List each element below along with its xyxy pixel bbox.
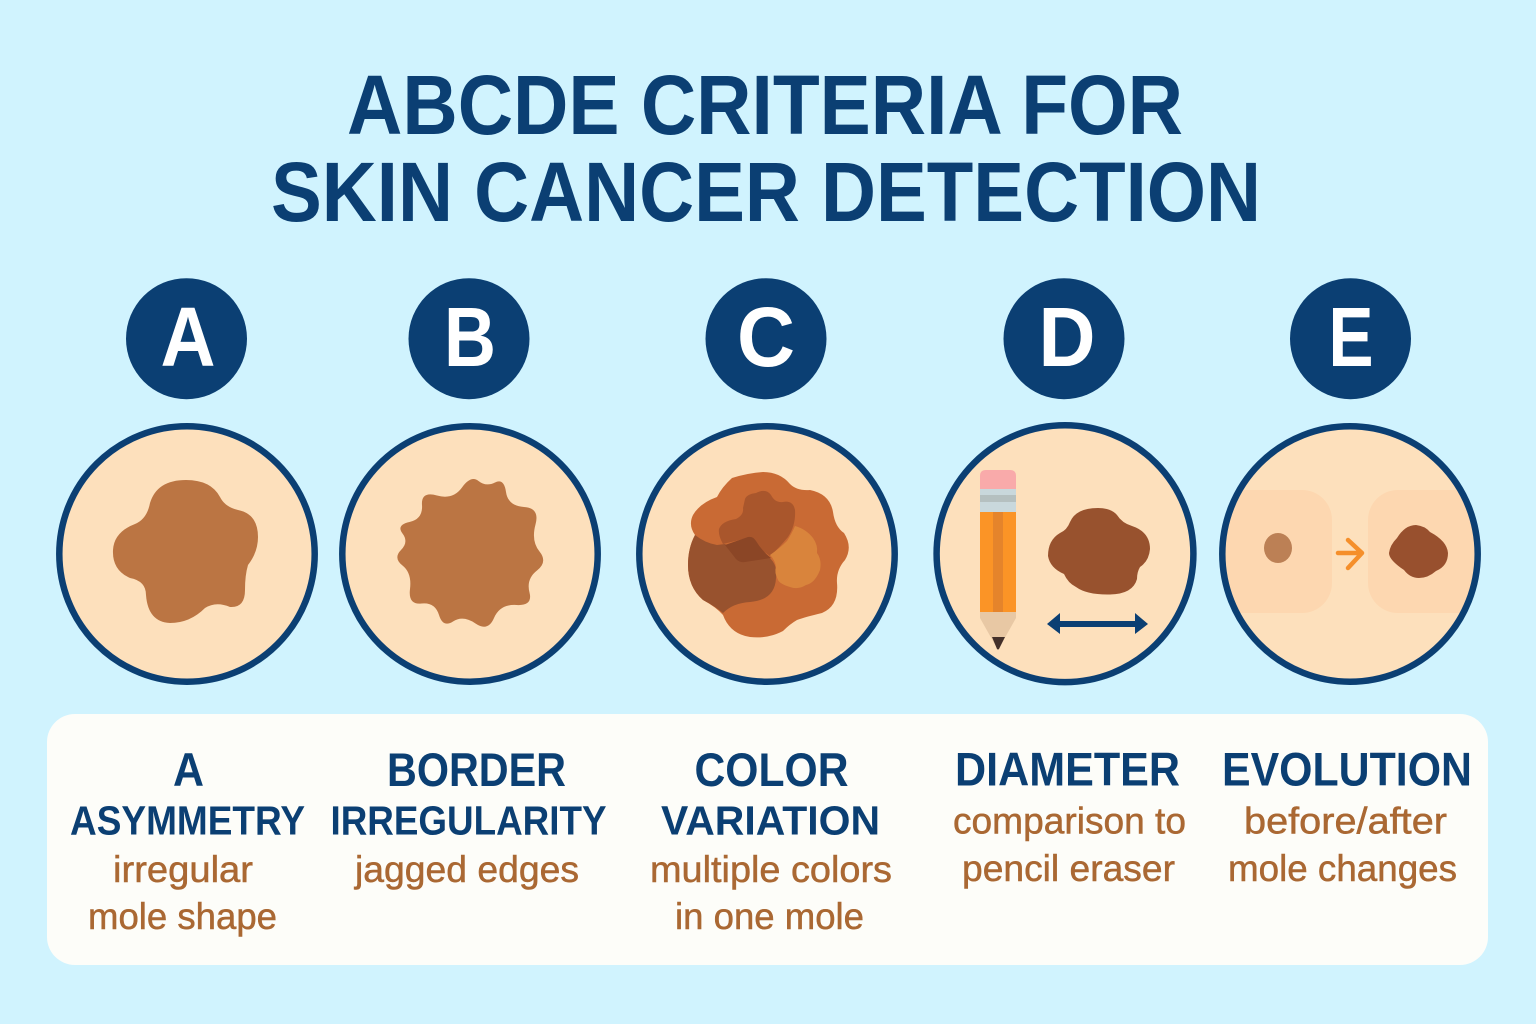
badge A: A: [160, 290, 216, 384]
panel: descriptions: [47, 714, 1488, 965]
jagged-edge mole: [397, 479, 543, 627]
dark brown region: [688, 535, 776, 613]
mid brown region: [719, 491, 795, 556]
illustration: border irregularity: [342, 426, 598, 682]
arrow: diameter measure: [1047, 613, 1148, 634]
text: asymmetry: irregular: [113, 849, 253, 890]
light orange region: [770, 526, 821, 588]
badge C: [706, 278, 826, 399]
text: color: COLOR: [694, 743, 848, 796]
title: SKIN CANCER DETECTION: [271, 145, 1261, 239]
badge E: [1290, 278, 1411, 399]
badge E: E: [1328, 290, 1374, 384]
darkest region: [725, 537, 771, 562]
text: evolution: [1222, 742, 1472, 889]
multicolor mole base: [688, 472, 849, 637]
text: diameter: comparison to: [953, 800, 1186, 842]
letter badges row: [126, 278, 1411, 399]
text: evolution: mole changes: [1228, 848, 1457, 889]
text: evolution: before/after: [1244, 800, 1447, 842]
text: asymmetry: [70, 743, 305, 937]
mole for size comparison: [1048, 508, 1150, 595]
text: asymmetry: ASYMMETRY: [70, 798, 305, 844]
before and after skin patches: [1226, 490, 1474, 613]
text: border: [330, 743, 606, 890]
text: color: [650, 743, 892, 937]
illustration: evolution: [1219, 423, 1481, 685]
small mole before: [1264, 533, 1292, 563]
text: asymmetry: A: [173, 743, 204, 796]
badge D: [1004, 278, 1124, 399]
text: diameter: pencil eraser: [962, 848, 1175, 889]
text: diameter: [953, 742, 1186, 889]
text: color: VARIATION: [661, 798, 880, 844]
badge C: C: [737, 290, 795, 384]
text: asymmetry: mole shape: [88, 896, 277, 937]
title: [271, 58, 1261, 239]
text: border: BORDER: [387, 743, 566, 796]
text: border: IRREGULARITY: [330, 798, 606, 844]
larger mole after: [1389, 525, 1448, 578]
badge D: D: [1038, 290, 1096, 384]
illustration: asymmetry: [59, 426, 315, 682]
text: border: jagged edges: [354, 849, 579, 890]
icon: pencil: [980, 470, 1016, 650]
text: color: in one mole: [675, 896, 864, 937]
arrow: change: [1338, 540, 1362, 568]
text: evolution: EVOLUTION: [1222, 742, 1472, 796]
illustration: color variation: [639, 426, 895, 682]
badge B: [408, 278, 530, 399]
title: ABCDE CRITERIA FOR: [347, 58, 1183, 152]
asymmetric mole: [113, 480, 258, 623]
badge B: B: [444, 290, 496, 384]
illustration: diameter: [937, 425, 1193, 682]
text: color: multiple colors: [650, 849, 892, 890]
badge A: [126, 278, 247, 399]
text: diameter: DIAMETER: [955, 742, 1180, 796]
